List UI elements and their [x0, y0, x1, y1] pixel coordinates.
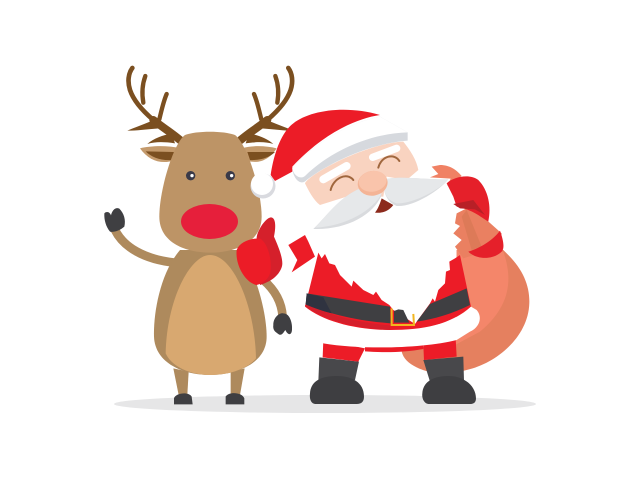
- ears: [140, 146, 277, 162]
- raised hoof: [104, 208, 125, 232]
- glove dark side and thumb: [257, 217, 282, 285]
- hat: [271, 110, 380, 181]
- head: [159, 132, 262, 253]
- moustache: [313, 178, 448, 229]
- mouth: [375, 198, 393, 213]
- belly: [166, 255, 256, 375]
- sack: [402, 165, 529, 374]
- jacket: [305, 253, 471, 330]
- hooves: [174, 313, 292, 404]
- red nose: [181, 204, 238, 239]
- sleeve: [288, 235, 315, 272]
- right antler: [241, 68, 293, 144]
- eyes: [186, 171, 235, 180]
- eyebrows: [323, 148, 397, 179]
- sack neck: [430, 165, 502, 258]
- nose: [356, 169, 390, 198]
- ground shadow: [114, 395, 536, 413]
- trousers: [323, 338, 457, 362]
- boots: [310, 357, 476, 404]
- glove and sleeve: thumbs up: [236, 217, 315, 285]
- glove front: [236, 238, 271, 285]
- belt buckle: [392, 308, 414, 325]
- belt: [306, 288, 470, 323]
- arms: [115, 230, 283, 317]
- left antler: [127, 68, 180, 144]
- body: [154, 250, 267, 375]
- reindeer: [104, 68, 293, 404]
- legs: [173, 368, 245, 395]
- sack body: [402, 250, 529, 374]
- eyes: [331, 156, 399, 190]
- Santa: [236, 110, 503, 404]
- sack hand glove: [447, 176, 503, 258]
- hat pom-pom: [250, 173, 276, 198]
- jacket fur trim: [305, 307, 480, 347]
- hat brim: [292, 117, 408, 182]
- face: [305, 142, 418, 205]
